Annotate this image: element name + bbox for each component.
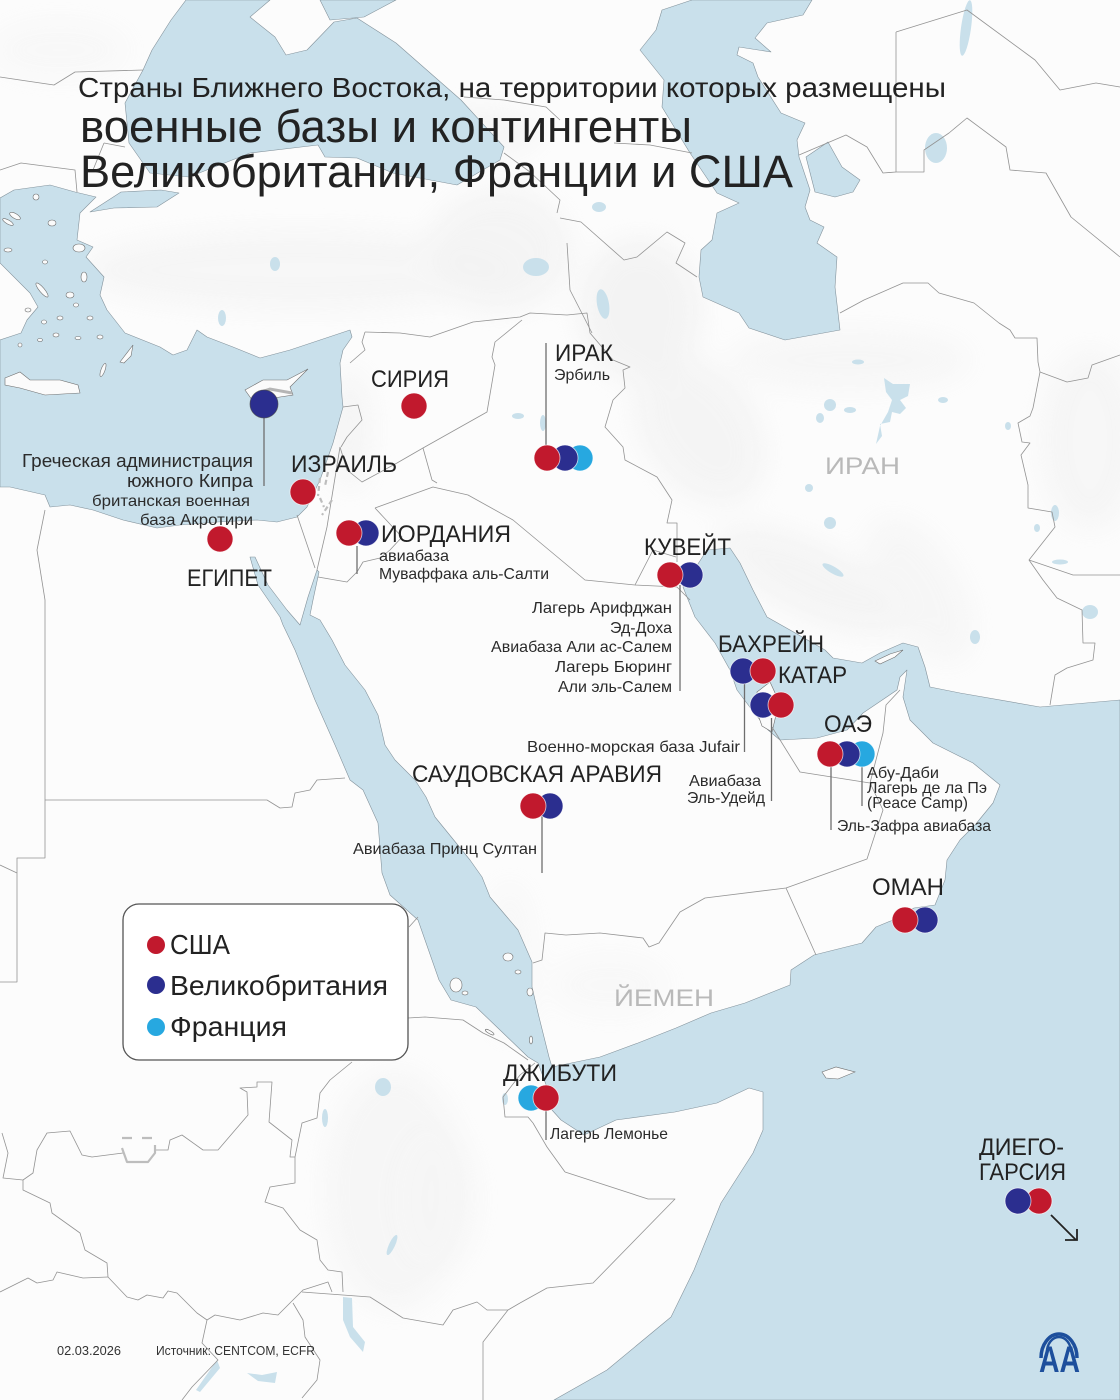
marker: Israel xyxy=(290,479,316,505)
Cyprus xyxy=(245,369,308,404)
Sea of Azov xyxy=(320,0,396,20)
title line 3: Великобритании, Франции и США xyxy=(80,146,793,197)
country labels: ОМАН xyxy=(872,874,944,901)
Kara-Bogaz-Gol xyxy=(806,142,860,197)
base labels: база Акротири xyxy=(140,512,253,529)
Abyei and Palestine dashed boundaries xyxy=(122,472,332,1162)
country labels: ОАЭ xyxy=(824,711,872,738)
legend xyxy=(123,904,408,1060)
country labels: БАХРЕЙН xyxy=(718,630,824,658)
Aegean islands xyxy=(2,194,107,377)
markers: Iraq xyxy=(534,445,593,471)
leader lines xyxy=(264,343,862,1140)
title line 2: военные базы и контингенты xyxy=(80,101,692,152)
Qeshm island xyxy=(875,650,903,664)
markers: UAE xyxy=(817,741,875,767)
base labels: Муваффака аль-Салти xyxy=(379,566,549,583)
markers: Bahrain xyxy=(730,658,776,684)
Red Sea islands xyxy=(450,953,533,1044)
Mediterranean and Aegean Sea xyxy=(0,185,352,528)
legend: France: Франция xyxy=(170,1011,287,1042)
base labels: Авиабаза Принц Султан xyxy=(353,841,537,858)
Red Sea, Gulf of Aden, Arabian Sea and Persian Gulf xyxy=(250,548,1120,1400)
country labels: ГАРСИЯ xyxy=(979,1159,1066,1186)
Rhodes xyxy=(120,345,133,363)
base labels: Авиабаза xyxy=(689,773,761,790)
marker: Cyprus xyxy=(250,390,278,418)
country labels: САУДОВСКАЯ АРАВИЯ xyxy=(412,761,662,788)
base labels: Лагерь де ла Пэ xyxy=(867,780,987,797)
base labels: Али эль-Салем xyxy=(558,679,672,696)
country labels: ИОРДАНИЯ xyxy=(381,521,511,548)
base labels: Лагерь Арифджан xyxy=(532,600,672,617)
markers: Oman xyxy=(892,907,938,933)
markers: Kuwait xyxy=(657,562,703,588)
base labels: британская военная xyxy=(92,493,250,510)
footer date: 02.03.2026 xyxy=(57,1343,121,1358)
Sea of Marmara xyxy=(90,190,179,212)
base labels: Эд-Доха xyxy=(610,620,672,637)
country labels: ЙЕМЕН xyxy=(614,984,714,1012)
country labels: ИЗРАИЛЬ xyxy=(291,451,397,478)
legend: UK: Великобритания xyxy=(170,970,388,1001)
legend: USA: США xyxy=(170,929,230,960)
Cyprus buffer zone xyxy=(258,389,292,393)
base labels: южного Кипра xyxy=(127,471,254,491)
Qatar peninsula xyxy=(757,682,776,732)
base labels: Эль-Зафра авиабаза xyxy=(837,818,991,835)
base labels: (Peace Camp) xyxy=(867,795,968,812)
markers: Saudi Arabia xyxy=(520,793,563,819)
Caspian Sea xyxy=(640,0,840,340)
base labels: Лагерь Бюринг xyxy=(555,659,672,676)
base labels: авиабаза xyxy=(379,548,449,565)
base labels xyxy=(22,367,991,1143)
Black Sea xyxy=(125,0,504,185)
title line 1: Страны Ближнего Востока, на территории которых размещены xyxy=(78,72,946,103)
markers: Qatar xyxy=(750,692,794,718)
country labels: ДЖИБУТИ xyxy=(503,1060,617,1087)
base labels: Эль-Удейд xyxy=(687,790,766,807)
country labels: КУВЕЙТ xyxy=(644,533,731,561)
base labels: Греческая администрация xyxy=(22,451,253,471)
country labels: ИРАК xyxy=(555,340,613,367)
Crete xyxy=(5,372,80,395)
base labels: Эрбиль xyxy=(554,367,610,384)
country labels: ЕГИПЕТ xyxy=(187,565,272,592)
Socotra xyxy=(822,1067,855,1079)
markers: Diego Garcia xyxy=(1005,1188,1052,1214)
country labels: КАТАР xyxy=(778,662,847,689)
marker: Egypt xyxy=(207,526,233,552)
country labels: СИРИЯ xyxy=(371,366,449,393)
markers: Jordan xyxy=(336,520,379,546)
logo: AA: AA xyxy=(1039,1339,1080,1380)
marker: Syria xyxy=(401,393,427,419)
base labels: Лагерь Лемонье xyxy=(550,1126,668,1143)
base markers xyxy=(207,390,1052,1214)
base labels: Авиабаза Али ас-Салем xyxy=(491,639,672,656)
country labels xyxy=(187,340,1066,1186)
markers: Djibouti xyxy=(518,1085,559,1111)
country labels: ДИЕГО- xyxy=(979,1134,1064,1161)
country labels: ИРАН xyxy=(825,453,900,480)
title xyxy=(78,72,946,197)
arrow: direction to Diego Garcia xyxy=(1051,1215,1077,1240)
footer source: Источник: CENTCOM, ECFR xyxy=(156,1343,315,1358)
base labels: Абу-Даби xyxy=(867,765,939,782)
legend: USA xyxy=(147,929,230,960)
base labels: Военно-морская база Jufair xyxy=(527,739,741,756)
